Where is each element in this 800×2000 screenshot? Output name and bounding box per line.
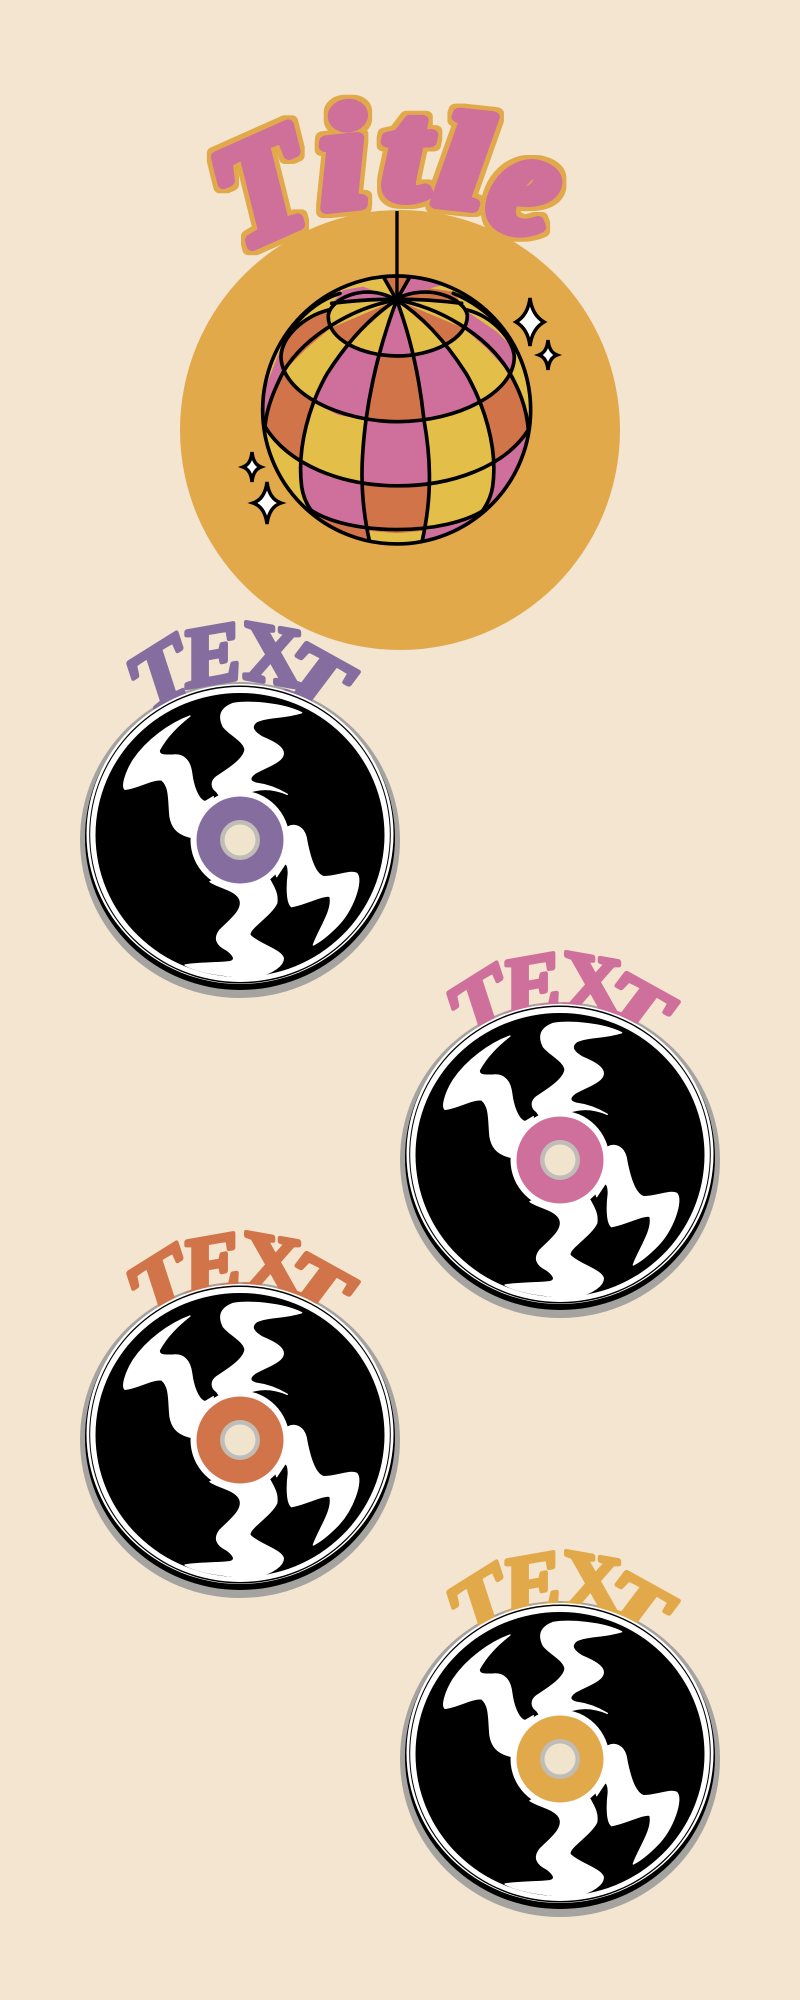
disc shadow ring — [400, 1002, 720, 1318]
spindle hole — [540, 1140, 580, 1180]
disc shadow ring — [400, 1601, 720, 1917]
label text: E — [185, 1214, 241, 1317]
disc shadow ring — [80, 682, 400, 998]
sparkles left — [243, 452, 281, 524]
title — [189, 75, 578, 279]
label text — [441, 933, 691, 1065]
label text — [121, 603, 371, 735]
centre label — [516, 1716, 604, 1802]
vinyl disc — [85, 684, 395, 990]
sparkles right — [516, 298, 557, 370]
label text: T — [261, 627, 371, 732]
vinyl disc — [405, 1004, 715, 1310]
disco ball string — [392, 211, 402, 302]
label text: E — [505, 934, 561, 1037]
title: T — [189, 95, 340, 279]
title: l — [430, 86, 495, 238]
disco ball illustration — [257, 211, 532, 547]
label text — [121, 1213, 371, 1345]
label text: T — [121, 613, 201, 735]
title: i — [309, 75, 374, 240]
centre label — [196, 796, 284, 884]
title: e — [475, 98, 578, 269]
label text: X — [563, 933, 623, 1037]
record 4: golden orange — [400, 1532, 720, 1917]
label text: T — [121, 1223, 201, 1345]
disco ball grid lines — [265, 277, 528, 543]
label text: E — [505, 1533, 561, 1636]
spindle hole — [540, 1739, 580, 1779]
orange sun circle — [180, 210, 620, 650]
spindle hole — [220, 1420, 260, 1460]
label text: X — [563, 1532, 623, 1636]
label text: E — [185, 604, 241, 707]
disco ball colour facets — [257, 273, 532, 547]
label text: T — [581, 1556, 691, 1661]
disc shadow ring — [80, 1282, 400, 1598]
label text: T — [261, 1237, 371, 1342]
centre label — [196, 1396, 284, 1484]
label text: T — [441, 1542, 521, 1664]
spindle hole — [220, 820, 260, 860]
record 2: pink — [400, 933, 720, 1318]
label text — [441, 1532, 691, 1664]
vinyl disc — [405, 1603, 715, 1909]
label text: X — [243, 1213, 303, 1317]
record 1: purple — [80, 603, 400, 998]
record 3: burnt orange — [80, 1213, 400, 1598]
centre label — [516, 1116, 604, 1204]
label text: X — [243, 603, 303, 707]
label text: T — [441, 943, 521, 1065]
vinyl disc — [85, 1284, 395, 1590]
label text: T — [581, 957, 691, 1062]
title: t — [382, 75, 432, 228]
